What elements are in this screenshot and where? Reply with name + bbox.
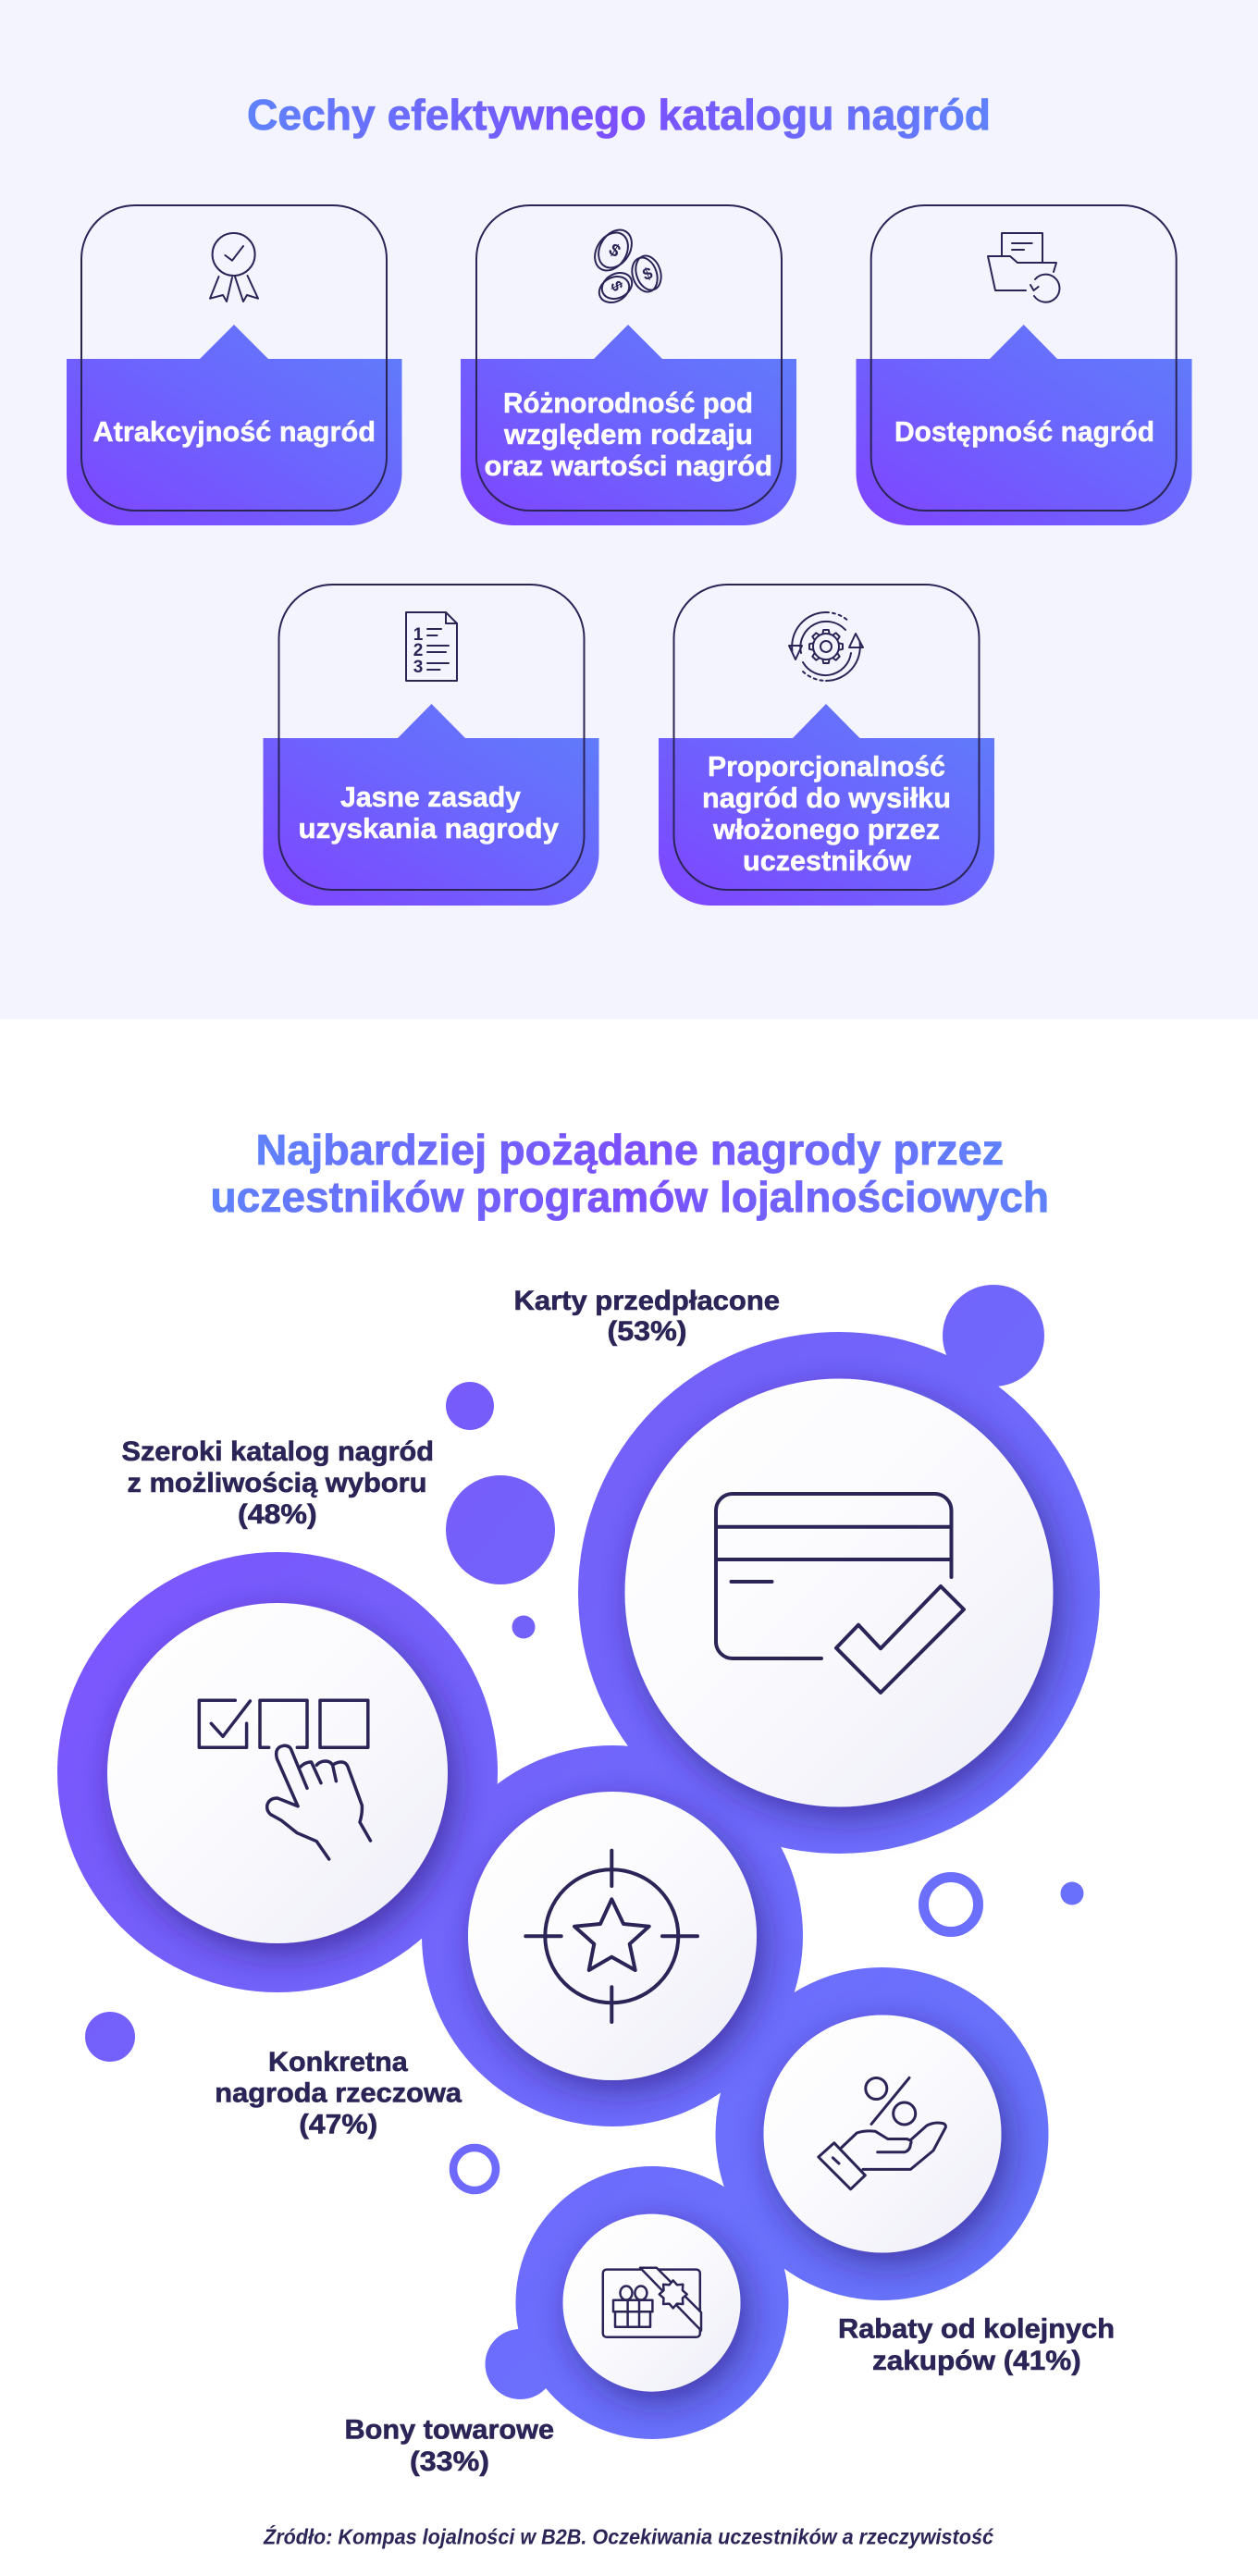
label: wide catalogue: Szeroki katalog nagród <box>122 1436 434 1467</box>
icon: coins <box>588 224 665 307</box>
label <box>485 387 772 482</box>
label: względem rodzaju <box>503 418 753 450</box>
label: nagród do wysiłku <box>702 782 951 814</box>
label: vouchers <box>344 2415 554 2477</box>
label: concrete reward: Konkretna <box>268 2047 408 2077</box>
label: Dostępność nagród <box>894 415 1154 448</box>
card: attractiveness <box>67 205 401 525</box>
label: Atrakcyjność nagród <box>92 415 376 448</box>
label: włożonego przez <box>712 813 940 845</box>
heading: most wanted rewards <box>211 1126 1049 1221</box>
label: Proporcjonalność <box>708 750 945 783</box>
card: clear rules <box>263 585 599 906</box>
label: vouchers: (33%) <box>410 2447 489 2477</box>
icon: card with check <box>716 1494 964 1693</box>
icon: choice hand <box>199 1700 370 1859</box>
card: proportionality <box>659 585 994 906</box>
icon: target star <box>525 1851 697 2022</box>
icon: coins: $ <box>607 278 626 294</box>
label: Różnorodność pod <box>503 387 753 419</box>
label: vouchers: Bony towarowe <box>344 2415 554 2446</box>
bubble: vouchers <box>562 2214 740 2392</box>
icon: numbered list: 3 <box>413 658 423 677</box>
icon: coins: $ <box>605 240 624 262</box>
label: uczestników <box>743 844 912 877</box>
label: Jasne zasady <box>340 781 522 813</box>
icon: rosette <box>210 233 258 302</box>
label: discounts: Rabaty od kolejnych <box>838 2314 1115 2344</box>
icon: numbered list <box>406 612 457 681</box>
card: availability <box>857 205 1191 525</box>
label: prepaid cards: (53%) <box>607 1316 686 1347</box>
label: uzyskania nagrody <box>298 812 560 844</box>
label: wide catalogue: z możliwością wyboru <box>128 1468 426 1498</box>
label: prepaid cards <box>514 1286 780 1347</box>
icon: numbered list: 1 <box>413 625 424 645</box>
icon: coins: $ <box>640 264 655 284</box>
label: prepaid cards: Karty przedpłacone <box>514 1286 780 1316</box>
label <box>298 781 560 844</box>
bubble: wide catalogue <box>107 1603 448 1943</box>
icon: numbered list: 2 <box>413 641 423 660</box>
icon: hand percent <box>819 2077 945 2189</box>
icon: gift card <box>603 2268 701 2337</box>
decorative bubbles <box>85 1285 1084 2399</box>
panel: features background <box>0 0 1258 1019</box>
label: concrete reward: (47%) <box>299 2110 377 2140</box>
card: variety <box>461 205 796 525</box>
label: wide catalogue: (48%) <box>238 1499 317 1530</box>
label <box>702 750 951 877</box>
heading: most wanted rewards: Najbardziej pożądane nagrody przez <box>255 1126 1004 1174</box>
label: oraz wartości nagród <box>485 450 772 482</box>
bubble: prepaid cards <box>625 1378 1053 1807</box>
label: concrete reward <box>215 2047 462 2140</box>
label: discounts: zakupów (41%) <box>872 2346 1081 2376</box>
label: wide catalogue <box>122 1436 434 1530</box>
label: concrete reward: nagroda rzeczowa <box>215 2078 462 2109</box>
bubble: concrete reward <box>468 1792 757 2080</box>
title: features: Cechy efektywnego katalogu nagród <box>247 91 991 139</box>
source note: Źródło: Kompas lojalności w B2B. Oczekiwania uczestników a rzeczywistość <box>263 2524 993 2549</box>
heading: most wanted rewards: uczestników programów lojalnościowych <box>211 1173 1049 1221</box>
label: discounts <box>838 2314 1115 2376</box>
icon: gear cycle <box>789 612 863 681</box>
icon: folder <box>988 233 1059 302</box>
outer bubbles <box>57 1332 1100 2439</box>
bubble: discounts <box>764 2015 1001 2253</box>
